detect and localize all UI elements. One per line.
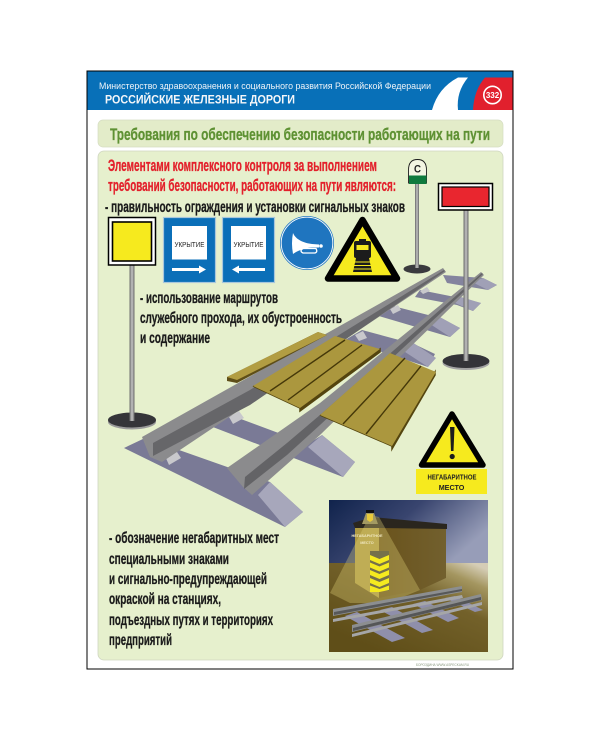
sleepers — [124, 275, 497, 527]
centre planks — [253, 336, 380, 411]
lamp — [362, 510, 378, 524]
poster number badge: 332 — [486, 91, 500, 100]
title panel — [98, 120, 503, 147]
blue sign: shelter left: УКРЫТИЕ — [234, 240, 264, 249]
building label: МЕСТО — [360, 541, 374, 545]
header band — [88, 72, 512, 110]
scene rails — [333, 586, 482, 637]
icon: train warning triangle — [328, 220, 397, 278]
bullet: service routes: и содержание — [140, 330, 210, 347]
red intro text — [108, 157, 396, 195]
main panel — [98, 151, 503, 660]
night scene illustration — [329, 500, 488, 652]
signal post with letter C — [404, 160, 430, 274]
scene sleepers — [345, 596, 483, 642]
bullet: clearance marking: окраской на станциях, — [109, 591, 221, 608]
bullet: clearance marking — [109, 530, 279, 649]
right planks — [320, 353, 436, 449]
clearance warning sign: МЕСТО — [439, 483, 465, 492]
left rail — [142, 268, 446, 462]
icon: horn sign — [280, 216, 334, 270]
track illustration — [124, 268, 497, 527]
red intro text: требований безопасности, работающих на пути являются: — [108, 177, 396, 195]
header ministry text: Министерство здравоохранения и социального развития Российской Федерации — [99, 81, 431, 92]
red intro text: Элементами комплексного контроля за выполнением — [108, 157, 377, 175]
building label — [351, 534, 383, 545]
middle sleeper — [205, 412, 355, 477]
bullet: service routes: служебного прохода, их обустроенность — [140, 310, 342, 327]
signal post with letter C: С — [414, 164, 421, 176]
building front — [355, 527, 379, 598]
blue sign: shelter left — [222, 218, 274, 282]
building label: НЕГАБАРИТНОЕ — [351, 534, 383, 538]
bullet: clearance marking: предприятий — [109, 632, 172, 649]
bullet: fencing and signs: - правильность ограждения и установки сигнальных знаков — [105, 199, 405, 216]
bullet: clearance marking: подъездных путях и территориях — [109, 612, 273, 629]
rear sleepers — [443, 275, 497, 290]
bullet: service routes: - использование маршрутов — [140, 290, 278, 307]
clearance warning sign — [416, 414, 487, 494]
bullet: clearance marking: и сигнально-предупреждающей — [109, 571, 267, 588]
header organisation name: РОССИЙСКИЕ ЖЕЛЕЗНЫЕ ДОРОГИ — [105, 94, 295, 106]
thin plank — [227, 332, 327, 383]
publisher small print: БОРОЗДИНА WWW.ASPECKAM.RU — [416, 663, 470, 667]
poster number badge — [484, 86, 501, 104]
bullet: service routes — [140, 290, 342, 347]
clearance warning sign: НЕГАБАРИТНОЕ — [428, 472, 477, 482]
bullet: clearance marking: специальными знаками — [109, 551, 229, 568]
header swoosh: red — [473, 78, 512, 110]
blue sign: shelter right: УКРЫТИЕ — [174, 240, 204, 249]
right rail — [227, 272, 484, 495]
poster frame — [87, 71, 513, 669]
header swoosh: white — [432, 78, 468, 110]
yellow sign on pole — [108, 218, 156, 430]
red sign on pole — [438, 184, 492, 370]
building side — [379, 526, 446, 598]
chevron stripes — [370, 551, 389, 592]
light cone — [330, 515, 420, 603]
building roof — [353, 517, 447, 529]
ground — [329, 563, 488, 652]
tie plates — [165, 452, 181, 465]
bullet: clearance marking: - обозначение негабаритных мест — [109, 530, 279, 547]
sky — [329, 500, 488, 564]
blue sign: shelter right — [164, 218, 216, 282]
front sleeper — [124, 438, 303, 527]
